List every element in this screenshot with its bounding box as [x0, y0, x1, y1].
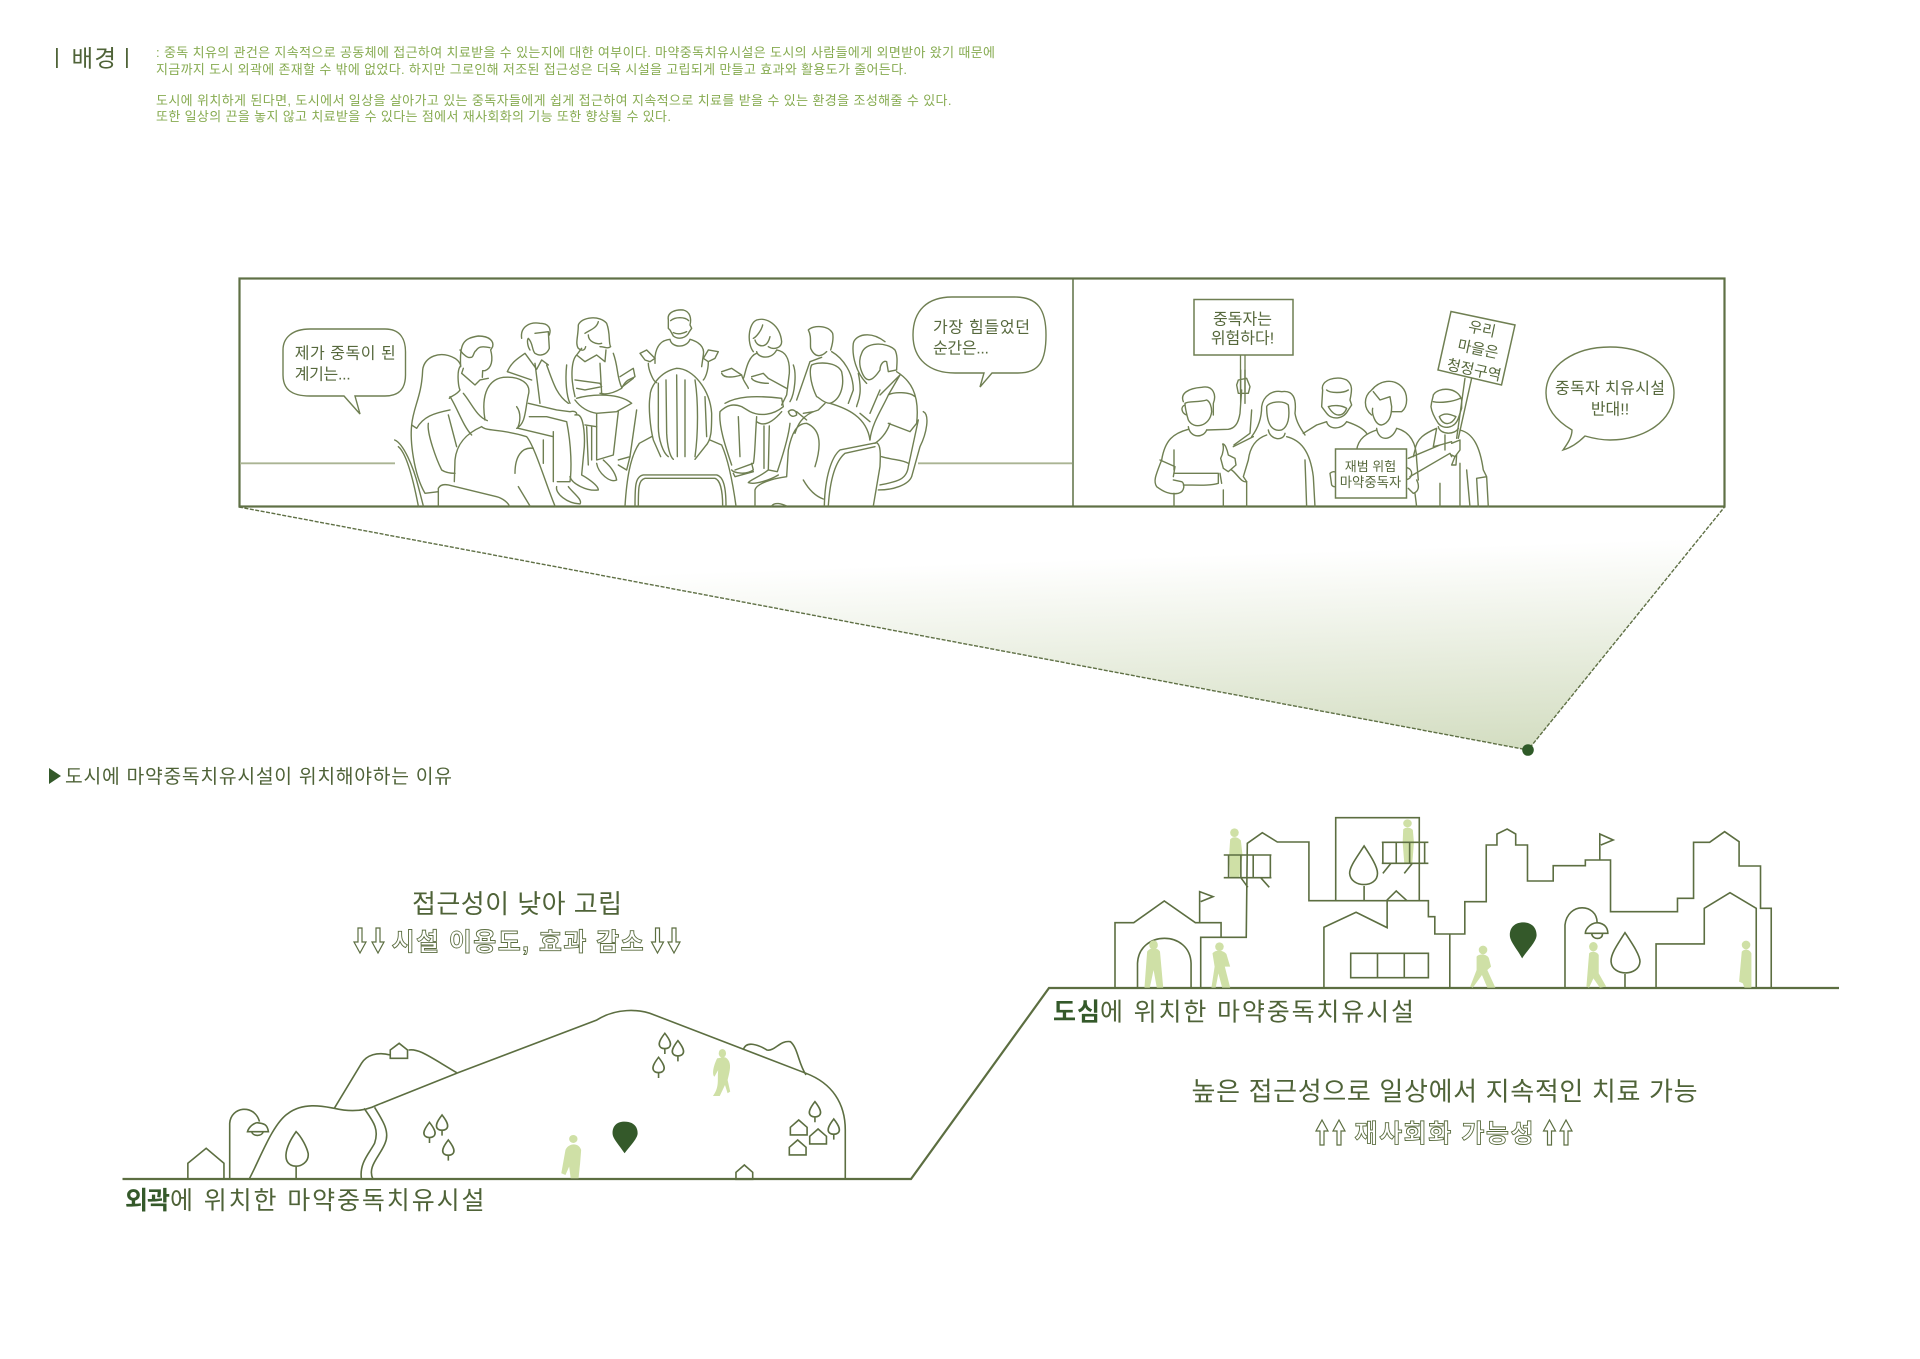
heading: why facilities should be in the city: 도시에 마약중독치유시설이 위치해야하는 이유 [65, 766, 452, 788]
header: background section [56, 45, 995, 124]
sign: 우리 마을은 청정구역: 청정구역 [1445, 357, 1503, 385]
speech bubble: 가장 힘들었던 순간은 [913, 297, 1046, 387]
lamp, houses and trees [188, 1033, 839, 1179]
arrows and text: resocialization potential: 재사회화 가능성 [1354, 1120, 1534, 1148]
sign: 우리 마을은 청정구역: 우리 [1467, 318, 1497, 341]
arrows and text: reduced usage: 시설 이용도, 효과 감소 [392, 928, 644, 956]
ground line connecting outskirts and downtown [122, 988, 1839, 1179]
speech bubble: 중독자 치유시설 반대: 중독자 치유시설 [1555, 380, 1665, 398]
label: downtown facility: 도심 [1053, 998, 1100, 1026]
speech bubble: 제가 중독이 된 계기는: 제가 중독이 된 [295, 344, 396, 362]
text block: background description: : 중독 치유의 관건은 지속적으로 공동체에 접근하여 치료받을 수 있는지에 대한 여부이다. 마약중독치유시설은 도시의 사람들에게 외면받아 왔기 때문에 [156, 45, 995, 60]
balconies [1224, 842, 1428, 887]
text: low accessibility [354, 889, 680, 956]
person walking on hill [713, 1049, 730, 1096]
person standing with bag [561, 1135, 581, 1178]
heading: 배경: 배경 [72, 46, 116, 72]
text block: background description: 또한 일상의 끈을 놓지 않고 치료받을 수 있다는 점에서 재사회화의 기능 또한 향상될 수 있다. [156, 109, 671, 124]
illustration: protesters with signs [1155, 300, 1515, 507]
label: outskirts facility: 외곽 [125, 1187, 170, 1215]
sign: 재범 위험 마약중독자 [1336, 449, 1406, 498]
text block: background description: 도시에 위치하게 된다면, 도시에서 일상을 살아가고 있는 중독자들에게 쉽게 접근하여 지속적으로 치료를 받을 수 있는 환경을 조성해줄 수 있다. [156, 93, 952, 108]
sign: 우리 마을은 청정구역 [1438, 312, 1515, 385]
illustration: downtown skyline [1115, 818, 1771, 988]
text: low accessibility: 접근성이 낮아 고립 [412, 889, 622, 919]
speech bubble: 중독자 치유시설 반대 [1546, 347, 1674, 450]
people on street and balconies [1144, 819, 1751, 988]
sign: 중독자는 위험하다: 중독자는 [1213, 310, 1272, 328]
speech bubble: 제가 중독이 된 계기는: 계기는... [295, 366, 351, 384]
label: outskirts facility: 에 위치한 마약중독치유시설 [170, 1187, 484, 1215]
speech bubble: 가장 힘들었던 순간은: 순간은... [933, 340, 989, 358]
location pin: downtown [1510, 922, 1537, 958]
building outlines [1115, 818, 1771, 988]
speech bubble: 제가 중독이 된 계기는 [283, 329, 406, 414]
heading: 배경 [56, 46, 128, 72]
arrows and text: resocialization potential [1316, 1120, 1572, 1148]
speech bubble: 가장 힘들었던 순간은: 가장 힘들었던 [933, 318, 1030, 336]
label: downtown facility: 에 위치한 마약중독치유시설 [1100, 998, 1414, 1026]
hills and terrain [249, 1010, 845, 1179]
sign: 중독자는 위험하다: 위험하다! [1211, 330, 1274, 348]
callout funnel from location point to scene frame [239, 507, 1724, 756]
text: high accessibility: 높은 접근성으로 일상에서 지속적인 치료 가능 [1192, 1076, 1698, 1106]
sign: 재범 위험 마약중독자: 재범 위험 [1345, 459, 1396, 474]
text: high accessibility [1192, 1076, 1698, 1148]
sign: 우리 마을은 청정구역: 마을은 [1456, 337, 1500, 362]
sign: 중독자는 위험하다 [1194, 300, 1293, 392]
text block: background description [156, 45, 995, 124]
sign: 재범 위험 마약중독자: 마약중독자 [1340, 475, 1401, 490]
speech bubble: 중독자 치유시설 반대: 반대!! [1591, 400, 1629, 418]
location pin: outskirts [613, 1122, 638, 1153]
text block: background description: 지금까지 도시 외곽에 존재할 수 밖에 없었다. 하지만 그로인해 저조된 접근성은 더욱 시설을 고립되게 만들고 효과와 활용도가 줄어든다. [156, 62, 907, 77]
illustration: outskirts landscape [188, 1010, 845, 1179]
illustration: group therapy circle [395, 310, 927, 506]
panel: scene frame [240, 278, 1724, 507]
